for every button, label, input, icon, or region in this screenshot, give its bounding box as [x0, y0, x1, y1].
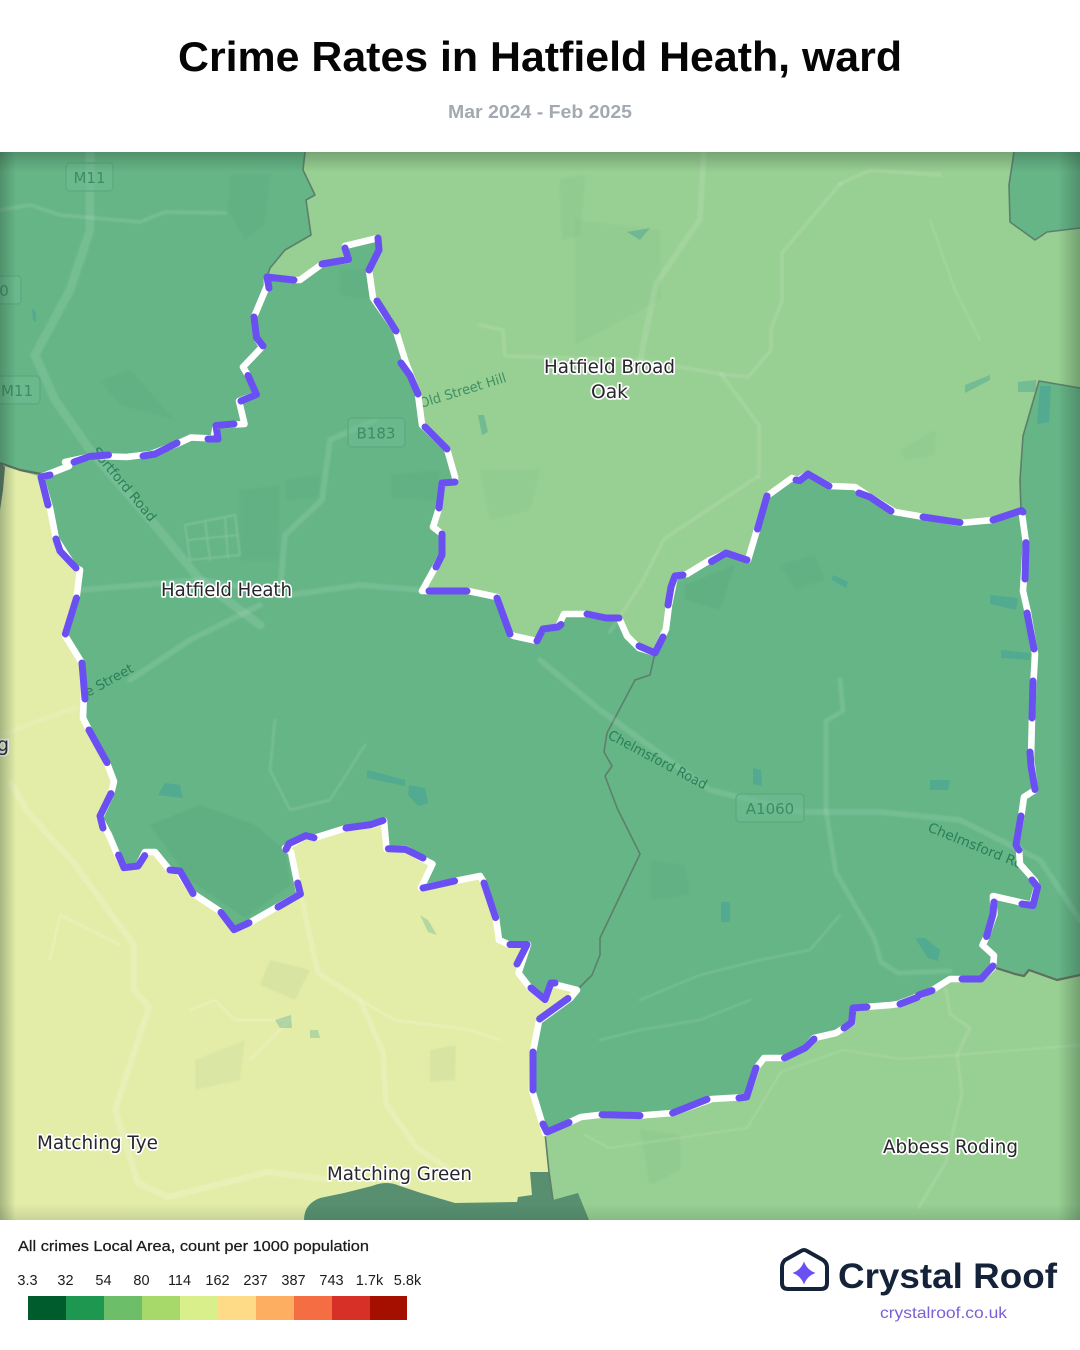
legend scale values: 5.8k — [394, 1273, 422, 1289]
legend scale values: 743 — [319, 1273, 344, 1289]
map edge vignette — [0, 152, 1080, 1220]
icon: house with star — [782, 1250, 827, 1289]
brand logo — [782, 1250, 1057, 1322]
date range subtitle: Mar 2024 - Feb 2025 — [448, 102, 632, 122]
ward boundary white underlay — [41, 238, 1037, 1133]
road shield: M11 north — [66, 163, 113, 191]
water bodies — [32, 228, 1051, 1038]
legend scale values: 387 — [281, 1273, 306, 1289]
road shield: partial left — [0, 276, 21, 304]
road shield: M11 south — [0, 376, 40, 404]
road shield: M11 south: M11 — [1, 382, 33, 400]
legend title: All crimes Local Area, count per 1000 population — [18, 1239, 369, 1255]
title: Crime Rates in Hatfield Heath, ward — [178, 33, 902, 80]
area: south-west yellow ward — [0, 465, 575, 1220]
place label: Hatfield Heath: Hatfield Heath — [161, 579, 292, 601]
ward edge lines — [0, 152, 1080, 1200]
place label: Matching Green: Matching Green — [327, 1163, 472, 1185]
area: Hatfield Heath ward fill — [41, 238, 1037, 1133]
legend scale values: 114 — [168, 1273, 191, 1289]
legend scale values — [17, 1273, 422, 1289]
road label: Chelmsford Road east: Chelmsford Ro — [926, 820, 1025, 873]
place label: Hatfield Broad Oak: Oak — [591, 381, 628, 403]
place label: Hatfield Broad Oak: Hatfield Broad — [544, 356, 675, 378]
area: far-left dark sliver — [0, 463, 5, 510]
legend scale values: 237 — [243, 1273, 268, 1289]
legend scale values: 162 — [205, 1273, 230, 1289]
road label: Sortford Road: Sortford Road — [88, 444, 159, 525]
road shield: B183 — [348, 418, 405, 447]
legend scale values: 1.7k — [356, 1273, 384, 1289]
ward boundary purple dashes — [41, 238, 1038, 1132]
area: east green ward — [986, 382, 1080, 979]
legend — [17, 1239, 422, 1320]
road shield: B183: B183 — [357, 424, 395, 442]
woodland and field patches — [196, 220, 581, 1088]
place label: Abbess Roding: Abbess Roding — [883, 1136, 1018, 1158]
area: neighbouring light green ward — [0, 152, 1080, 1220]
area: north-west green ward — [0, 152, 315, 478]
map panel — [0, 150, 1080, 1220]
brand name: Crystal Roof — [838, 1257, 1057, 1296]
road shield: A1060 — [736, 794, 804, 822]
road label: Old Street Hill: Old Street Hill — [417, 370, 508, 412]
legend scale values: 54 — [95, 1273, 112, 1289]
legend scale values: 32 — [57, 1273, 74, 1289]
road shield: M11 north: M11 — [73, 169, 106, 187]
place label: Hatfield Broad Oak — [544, 356, 675, 403]
legend scale values: 80 — [133, 1273, 150, 1289]
road network — [0, 150, 1080, 1207]
place label: Matching Tye: Matching Tye — [37, 1132, 158, 1154]
legend colour bar — [28, 1296, 407, 1320]
road label: Lane Street fragment: e Street — [82, 661, 136, 700]
road label: Chelmsford Road west: Chelmsford Road — [605, 727, 710, 793]
road shield: A1060: A1060 — [746, 800, 794, 818]
area: north-east green ward patch — [1009, 152, 1080, 240]
brand url: crystalroof.co.uk — [880, 1305, 1008, 1322]
legend scale values: 3.3 — [17, 1273, 38, 1289]
area: dark green south ward — [304, 1172, 589, 1220]
